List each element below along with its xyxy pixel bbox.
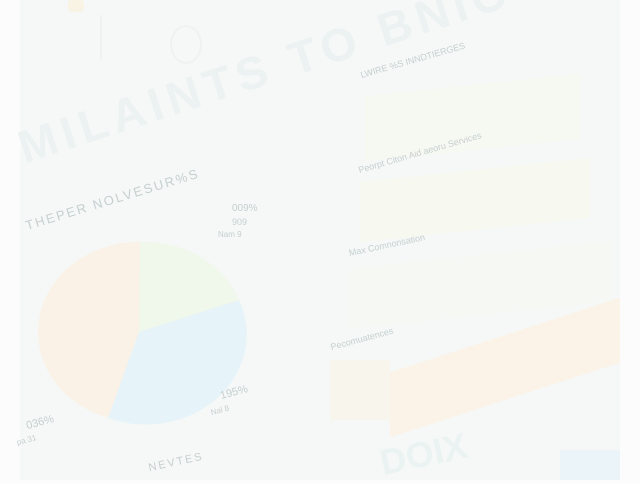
pie labels: Nal 8 bbox=[210, 403, 230, 417]
right panel: bars: Pecomuatences bbox=[329, 326, 394, 352]
right panel: bars: DOIX bbox=[376, 425, 471, 483]
pie labels: 195% bbox=[219, 383, 249, 402]
pie chart bbox=[38, 242, 246, 424]
pie labels bbox=[16, 203, 258, 474]
right panel: bars: LWIRE %S INNDTIERGES bbox=[359, 41, 466, 80]
icon: decorative sketch top-left bbox=[68, 0, 84, 12]
pie labels: Nam 9 bbox=[218, 230, 242, 239]
heading: pie chart: THEPER NOLVESUR%S bbox=[24, 166, 201, 233]
right panel: bars: Peorpt Citon Aid aeoru Services bbox=[357, 130, 483, 175]
right panel: bars bbox=[329, 41, 620, 483]
pie labels: pa 31 bbox=[16, 433, 37, 447]
right panel: bars: Max Comnonsation bbox=[348, 232, 426, 258]
pie labels: 909 bbox=[232, 217, 247, 227]
pie labels: 009% bbox=[232, 203, 258, 214]
pie labels: NEVTES bbox=[148, 451, 205, 474]
pie labels: 036% bbox=[25, 413, 55, 432]
